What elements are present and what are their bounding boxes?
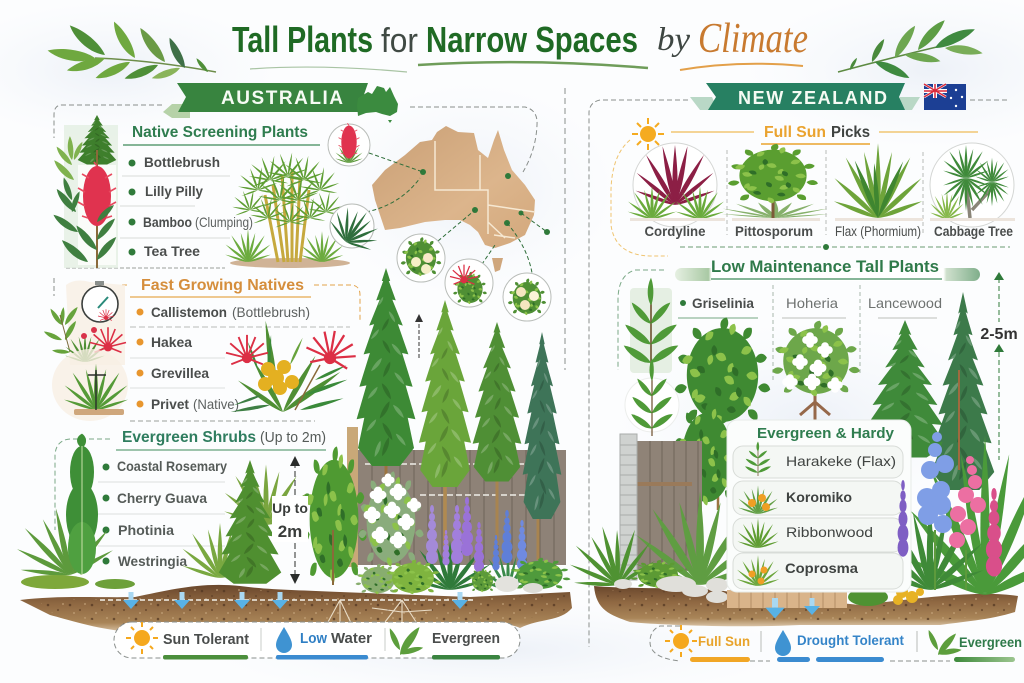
height arrow: tall trees [415, 314, 423, 358]
heading: Evergreen Shrubs: (Up to 2m) [260, 429, 326, 446]
row: Harakeke [733, 442, 903, 478]
icon: evergreen leaves [387, 625, 424, 657]
tree: cypress 1 [357, 268, 415, 480]
icon: NZ flag [924, 84, 966, 110]
heading: Native Screening Plants: Native Screening Plants [132, 124, 308, 141]
list: low maintenance names [678, 285, 942, 380]
icon: stopwatch [66, 281, 125, 365]
dimension: up to 2m: 2m [278, 522, 302, 541]
panel frame [589, 100, 1010, 647]
plant: Cordyline [627, 143, 725, 239]
row: Ribbonwood [733, 518, 903, 552]
list: native screening: Bottlebrush [144, 154, 220, 170]
list: low maintenance names: Lancewood [868, 295, 942, 311]
list: fast growing: Callistemon [151, 304, 227, 320]
tree: hoheria [772, 320, 860, 420]
frame: low maintenance [618, 270, 664, 370]
water arrows [123, 592, 468, 609]
dimension: 2-5m: 2-5m [980, 326, 1018, 343]
tree: cypress 2 [419, 300, 471, 545]
purple spike over panel [898, 480, 908, 557]
icon: water drop [276, 627, 292, 653]
tree: griselinia bush [673, 316, 771, 510]
list: evergreen shrubs: Cherry Guava [117, 490, 207, 506]
legend: Australia [114, 622, 520, 660]
heading: Low Maintenance Tall Plants: Low Maintenance Tall Plants [711, 257, 939, 276]
map of Australia [366, 126, 550, 280]
plant: big leaf and spiky [9, 434, 135, 589]
banner: Australia: AUSTRALIA [221, 88, 343, 109]
list: fast growing: Grevillea [151, 365, 209, 381]
thumbnail: bottlebrush [328, 123, 370, 166]
sprig: header left [47, 20, 216, 83]
icon: evergreen leaves [926, 629, 962, 657]
panel: Evergreen and Hardy [727, 420, 911, 592]
title: Tall Plants [232, 19, 373, 60]
list: native screening: Bamboo [143, 214, 192, 230]
plant: Pittosporum [721, 143, 829, 239]
heading: Evergreen Shrubs [55, 429, 326, 530]
list: fast growing: Hakea [151, 334, 192, 350]
heading: Fast Growing Natives: Fast Growing Natives [141, 277, 304, 294]
centre divider [564, 88, 566, 370]
illustration: bottlebrush and pine [51, 115, 118, 268]
heading: Full Sun Picks [671, 124, 978, 144]
plant: Cabbage Tree: Cabbage Tree [934, 223, 1013, 239]
title [232, 16, 808, 72]
plant: Pittosporum: Pittosporum [735, 223, 813, 239]
list: evergreen shrubs: Photinia [118, 522, 174, 538]
row: Harakeke: Harakeke (Flax) [786, 453, 896, 469]
illustration: red and yellow natives [226, 320, 359, 414]
tree: cypress 3 [473, 322, 521, 545]
heading: Low Maintenance Tall Plants [675, 257, 980, 281]
title: for [381, 22, 418, 60]
shrub: bright [301, 444, 367, 585]
tree: lancewood conifer [864, 320, 946, 458]
thumbnail: pine sprig [324, 198, 388, 257]
sprig panel [622, 278, 680, 436]
flowers: blue spikes [481, 510, 535, 591]
row: Coprosma [733, 553, 903, 589]
icon: sun [665, 625, 697, 657]
shrub: conical [181, 460, 309, 584]
heading: Evergreen and Hardy: Evergreen & Hardy [757, 425, 895, 442]
list: native screening [66, 154, 253, 268]
illustration: bamboo [225, 152, 350, 268]
row: Koromiko [733, 481, 903, 515]
plant: Cabbage Tree [930, 143, 1015, 239]
tree: tall conifer [932, 292, 994, 490]
legend: Australia: Evergreen [432, 630, 500, 647]
panel: Australia [9, 83, 572, 660]
title: Narrow Spaces [426, 19, 638, 60]
panel: New Zealand [561, 83, 1024, 662]
flowers: lavender [407, 497, 493, 591]
dimension: 2-5m [980, 272, 1018, 460]
wood slats [727, 590, 847, 608]
soil: New Zealand [594, 576, 1018, 626]
legend: New Zealand: Full Sun [698, 633, 750, 649]
list: native screening: Tea Tree [144, 243, 200, 259]
list: evergreen shrubs: Westringia [118, 553, 187, 569]
sprig: header right [838, 17, 983, 81]
heading: Evergreen Shrubs: Evergreen Shrubs [122, 429, 256, 446]
fence: New Zealand [620, 434, 702, 580]
thumbnail: red flower [445, 259, 493, 307]
banner: New Zealand: NEW ZEALAND [738, 88, 887, 108]
tree: cypress 4 [523, 332, 561, 560]
list: low maintenance names: Griselinia [692, 295, 754, 311]
plant: Cordyline: Cordyline [644, 223, 706, 239]
list: fast growing: Privet [151, 396, 189, 412]
list: fast growing: (Bottlebrush) [232, 304, 310, 320]
heading: Full Sun Picks: Full Sun [764, 124, 826, 141]
row: Coprosma: Coprosma [785, 560, 858, 576]
icon: sun [126, 622, 158, 654]
banner: Australia [163, 83, 368, 118]
plants: yucca and shrub [561, 492, 766, 598]
list: fast growing: (Native) [193, 396, 239, 412]
water arrows: NZ [765, 598, 820, 618]
icon: Australia silhouette [357, 86, 398, 123]
legend: Australia: Low [300, 630, 327, 647]
title: by [657, 22, 690, 58]
legend: Australia: Sun Tolerant [163, 631, 249, 648]
icon: sun [632, 118, 664, 150]
frame: full sun [611, 140, 668, 256]
illustration: sprig and red flower [43, 305, 126, 363]
title: Climate [698, 16, 808, 62]
row: Koromiko: Koromiko [786, 489, 852, 505]
list: native screening: Lilly Pilly [145, 183, 203, 199]
shrub: white flowers [358, 470, 424, 568]
list: fast growing [130, 304, 350, 421]
legend: New Zealand: Drought Tolerant [797, 632, 904, 648]
ground cover and rocks [355, 557, 571, 595]
banner: New Zealand [690, 83, 920, 110]
plant: Flax: Flax (Phormium) [835, 224, 921, 239]
dimension: up to 2m [272, 456, 308, 584]
thumbnail: cream blossoms [503, 273, 551, 321]
list: low maintenance names: Hoheria [786, 295, 838, 311]
list: evergreen shrubs [98, 458, 227, 569]
soil: Australia [20, 585, 572, 632]
thumbnail: white flowers [397, 234, 445, 282]
dimension: up to 2m: Up to [272, 500, 308, 516]
heading: Full Sun Picks: Picks [831, 124, 870, 141]
plant: Flax [833, 143, 923, 239]
panel frame [54, 105, 537, 300]
icon: water drop [775, 630, 791, 656]
legend: New Zealand [650, 625, 1022, 662]
list: native screening: (Clumping) [195, 214, 253, 230]
illustration: privet [52, 349, 128, 421]
flowers: right border [848, 432, 1024, 606]
row: Ribbonwood: Ribbonwood [786, 524, 873, 540]
heading: Fast Growing Natives [122, 277, 360, 322]
fence [347, 427, 566, 567]
list: evergreen shrubs: Coastal Rosemary [117, 458, 227, 474]
legend: Australia: Water [331, 630, 372, 647]
